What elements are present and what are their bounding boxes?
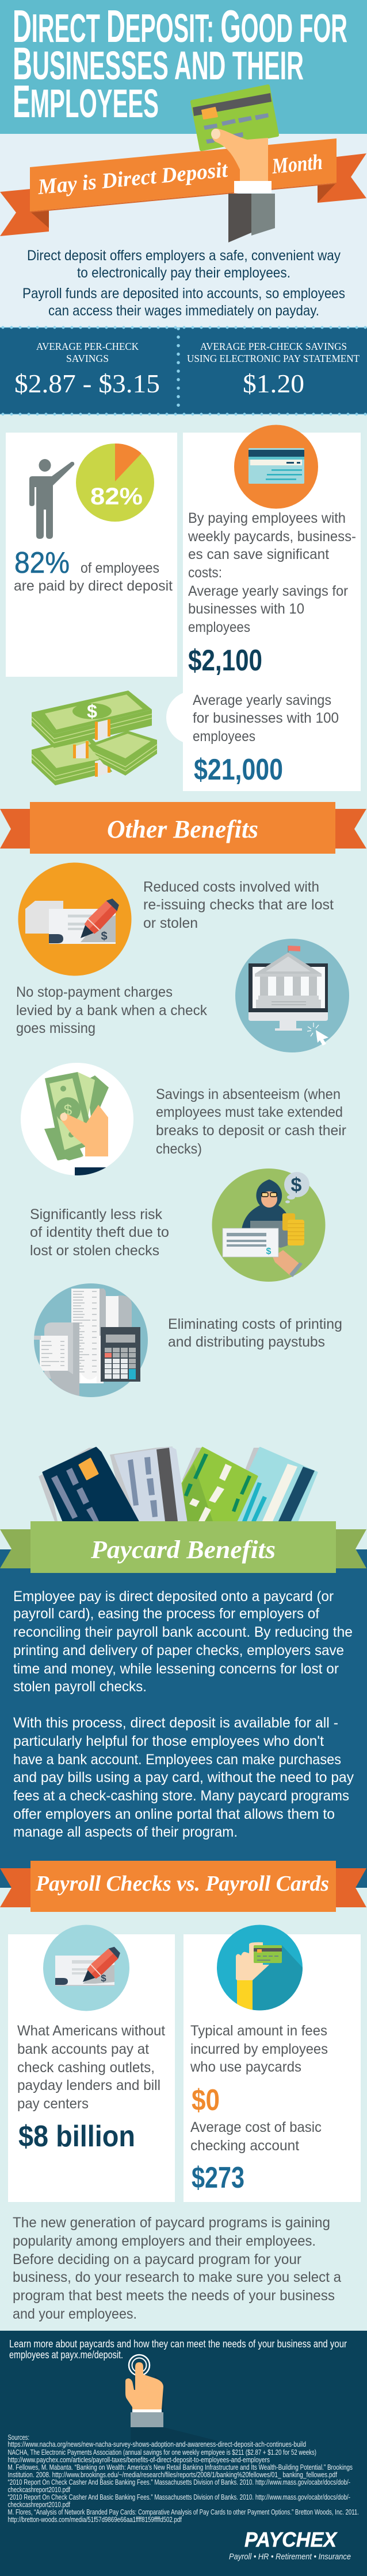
text: closing paragraph: The new generation of paycard programs is gaining — [13, 2215, 330, 2231]
text: identity theft — [30, 1206, 169, 1259]
text: paycard explanation: particularly helpful for those employees who don't — [13, 1733, 324, 1749]
text: paycard explanation: fees at a check-cashing store. Many paycard programs — [13, 1788, 349, 1804]
pie chart: 82 percent — [76, 444, 154, 522]
text: weekly paycards savings — [188, 510, 356, 635]
panel: 82 percent direct deposit — [6, 433, 177, 677]
background: header teal — [0, 0, 367, 134]
logo: Paychex — [229, 2528, 351, 2562]
text: weekly paycards savings: By paying employees with — [188, 510, 346, 526]
ribbon: Payroll Checks vs. Payroll Cards: Payroll Checks vs. Payroll Cards — [35, 1872, 329, 1896]
stat: average per-check savings — [14, 341, 160, 398]
text: paycard explanation — [13, 1588, 354, 1840]
stat: $2,100: $2,100 — [188, 644, 262, 677]
text: weekly paycards savings: Average yearly savings for — [188, 583, 348, 599]
text: paycard explanation: Employee pay is direct deposited onto a paycard (or — [13, 1588, 334, 1605]
benefit: eliminating paystubs — [34, 1283, 342, 1402]
intro text: Direct deposit offers employers a safe, convenient way — [27, 248, 341, 264]
stat: $8 billion: $8 billion — [18, 2120, 135, 2153]
text: no stop-payment: goes missing — [16, 1020, 95, 1036]
icon: hooded thief with stolen check — [212, 1169, 326, 1282]
ribbon: May is Direct Deposit Month: Month — [270, 150, 323, 179]
icon: hooded thief with stolen check: $ — [291, 1174, 302, 1196]
text: what Americans pay — [17, 2023, 165, 2112]
navy card — [39, 1448, 138, 1521]
text: weekly paycards savings: weekly paycards, business- — [188, 529, 356, 545]
background: intro pale blue — [0, 134, 367, 327]
stat: savings using electronic pay statement: USING ELECTRONIC PAY STATEMENT — [187, 353, 360, 364]
panel: payroll checks — [8, 1925, 175, 2202]
icon: online bank on monitor — [235, 939, 349, 1052]
text: no stop-payment: levied by a bank when a check — [16, 1002, 207, 1019]
logo: Paychex: PAYCHEX — [244, 2528, 338, 2551]
text: sources: checkcashreport2010.pdf — [8, 2500, 70, 2509]
icon: hand holding credit card — [192, 86, 277, 242]
text: weekly paycards savings: es can save significant — [188, 546, 329, 562]
icon: stacks of cash: $ — [87, 701, 97, 722]
icon: card in orange circle — [234, 425, 318, 509]
ribbon: Payroll Checks vs. Payroll Cards — [0, 1861, 366, 1912]
text: closing paragraph: and your employees. — [13, 2306, 137, 2322]
text: reduced costs — [143, 879, 334, 931]
text: paycard explanation: and pay bills using a pay card, without the need to pay — [13, 1769, 354, 1786]
text: savings in absenteeism: breaks to deposit or cash their — [156, 1123, 346, 1139]
icon: four payment cards — [39, 1447, 317, 1521]
ribbon: Paycard Benefits: Paycard Benefits — [90, 1536, 276, 1564]
stat: 82% of employees: 82% — [14, 546, 70, 580]
text: reduced costs: re-issuing checks that are lost — [143, 897, 334, 913]
icon: pen signing check: $ — [101, 1973, 106, 1984]
text: paycard explanation: manage all aspects of their program. — [13, 1824, 238, 1840]
text: what Americans pay: payday lenders and bill — [17, 2077, 160, 2093]
text: paycard explanation: payroll card), easing the process for employers of — [13, 1606, 319, 1622]
ribbon: Other Benefits: Other Benefits — [107, 815, 258, 843]
text: 100 employees savings — [193, 692, 339, 745]
stat: savings using electronic pay statement — [187, 341, 360, 398]
text: closing paragraph: program that best meets the needs of your business — [13, 2288, 335, 2304]
icon: pen signing check on orange circle — [18, 863, 131, 975]
text: sources: http://bretton-woods.com/media/51f57d9869e66aa1ffff8159ffffd502.pdf — [8, 2515, 182, 2524]
icon: hand holding paycard — [217, 1925, 303, 2011]
benefit: reduced costs — [18, 863, 334, 975]
stat: $21,000: $21,000 — [194, 753, 283, 786]
stat: average per-check savings: SAVINGS — [66, 353, 109, 364]
panel: savings stats band — [0, 327, 367, 414]
benefit: savings in absenteeism — [21, 1063, 346, 1177]
text: closing paragraph — [13, 2215, 341, 2322]
title — [13, 1, 347, 127]
stat: 82% of employees: of employees — [81, 560, 159, 576]
text: eliminating paystubs: Eliminating costs of printing — [168, 1316, 342, 1332]
text: paycard explanation: time and money, while lessening concerns for lost or — [13, 1661, 339, 1677]
text: sources: Sources: — [8, 2433, 29, 2442]
text: sources: http://www.paychex.com/articles/payroll-taxes/benefits-of-direct-deposit-to-employees-and-employers — [8, 2455, 270, 2464]
text: 100 employees savings: Average yearly savings — [193, 692, 331, 708]
stat: average per-check savings: AVERAGE PER-CHECK — [36, 341, 139, 352]
text: paycard explanation: With this process, direct deposit is available for all - — [13, 1715, 338, 1731]
icon: pen signing check — [43, 1925, 129, 2011]
icon: receipts and calculator — [34, 1283, 148, 1402]
pale blue card — [110, 1447, 186, 1521]
text: basic checking cost — [190, 2119, 322, 2154]
text: what Americans pay: pay centers — [17, 2096, 89, 2112]
text: what Americans pay: check cashing outlets, — [17, 2060, 155, 2076]
ribbon: Paycard Benefits — [0, 1521, 366, 1573]
benefit: no stop-payment charges — [16, 939, 349, 1052]
stat: 82% of employees — [14, 546, 173, 594]
text: basic checking cost: checking account — [190, 2138, 299, 2154]
stat: average per-check savings: $2.87 - $3.15 — [14, 369, 160, 398]
text: identity theft: lost or stolen checks — [30, 1243, 159, 1259]
panel: paycard benefits band — [0, 1549, 367, 1888]
intro text: can access their wages immediately on payday. — [48, 303, 319, 319]
text: what Americans pay: bank accounts pay at — [17, 2041, 149, 2057]
text: no stop-payment — [16, 984, 207, 1036]
stat: savings using electronic pay statement: $1.20 — [243, 369, 304, 398]
text: paycard explanation: printing and delivery of paper checks, employers save — [13, 1642, 344, 1659]
text: identity theft: of identity theft due to — [30, 1224, 169, 1240]
text: reduced costs: Reduced costs involved with — [143, 879, 319, 895]
icon: hand holding banknotes — [21, 1063, 133, 1177]
icon: hooded thief with stolen check: $ — [266, 1247, 272, 1256]
stat: $273: $273 — [192, 2161, 244, 2195]
stat: 82% of employees: are paid by direct deposit — [14, 578, 173, 594]
text: eliminating paystubs: and distributing paystubs — [168, 1334, 325, 1350]
panel: paycard savings — [166, 425, 361, 791]
text: paycard explanation: reconciling their payroll bank account. By reducing the — [13, 1624, 353, 1640]
text: weekly paycards savings: costs: — [188, 565, 222, 581]
text: savings in absenteeism: employees must take extended — [156, 1104, 343, 1120]
intro text: to electronically pay their employees. — [77, 265, 290, 281]
text: closing paragraph: business, do your research to make sure you select a — [13, 2269, 341, 2285]
text: savings in absenteeism — [156, 1086, 346, 1157]
text: closing paragraph: popularity among employers and their employees. — [13, 2233, 316, 2249]
text: paycard explanation: offer employers an online portal that allows them to — [13, 1806, 335, 1822]
text: sources — [8, 2433, 359, 2524]
text: closing paragraph: Before deciding on a paycard program for your — [13, 2251, 301, 2268]
text: 100 employees savings: employees — [193, 728, 255, 745]
text: basic checking cost: Average cost of basic — [190, 2119, 322, 2135]
benefit: less identity theft — [30, 1169, 326, 1282]
text: paycard explanation: stolen payroll checks. — [13, 1679, 147, 1695]
text: weekly paycards savings: businesses with 10 — [188, 601, 304, 617]
ribbon: Other Benefits — [0, 802, 366, 854]
text: 100 employees savings: for businesses with 100 — [193, 710, 339, 726]
teal card — [236, 1448, 317, 1521]
text: typical fees — [190, 2023, 328, 2075]
panel: payroll cards — [183, 1925, 361, 2202]
text: savings in absenteeism: Savings in absenteeism (when — [156, 1086, 341, 1102]
intro text — [22, 248, 345, 319]
icon: person pointing — [29, 459, 74, 539]
text: paycard explanation: have a bank account. Employees can make purchases — [13, 1752, 341, 1768]
text: learn more — [9, 2338, 347, 2361]
icon: stacks of cash — [32, 691, 157, 785]
text: typical fees: incurred by employees — [190, 2041, 328, 2057]
text: savings in absenteeism: checks) — [156, 1141, 202, 1157]
stat: $0: $0 — [192, 2084, 220, 2117]
text: typical fees: who use paycards — [190, 2059, 301, 2075]
text: reduced costs: or stolen — [143, 915, 198, 931]
pie chart: 82 percent: 82% — [90, 483, 143, 510]
icon: hand holding banknotes: $ — [64, 1101, 72, 1119]
green card — [182, 1448, 257, 1521]
text: what Americans pay: What Americans without — [17, 2023, 165, 2039]
title: EMPLOYEES — [13, 76, 159, 127]
icon: pen signing check on orange circle: $ — [101, 930, 108, 943]
text: typical fees: Typical amount in fees — [190, 2023, 327, 2039]
text: no stop-payment: No stop-payment charges — [16, 984, 173, 1000]
text: weekly paycards savings: employees — [188, 619, 250, 635]
text: learn more: employees at payx.me/deposit. — [9, 2349, 123, 2361]
icon: finger pressing button — [125, 2355, 220, 2442]
text: identity theft: Significantly less risk — [30, 1206, 162, 1223]
text: sources: checkcashreport2010.pdf — [8, 2485, 70, 2494]
panel: footer — [0, 2331, 367, 2576]
ribbon: May is Direct Deposit Month: May is Direct Deposit — [36, 157, 230, 199]
stat: savings using electronic pay statement: AVERAGE PER-CHECK SAVINGS — [200, 341, 347, 352]
ribbon: May is Direct Deposit Month — [0, 138, 366, 236]
text: eliminating paystubs — [168, 1316, 342, 1350]
